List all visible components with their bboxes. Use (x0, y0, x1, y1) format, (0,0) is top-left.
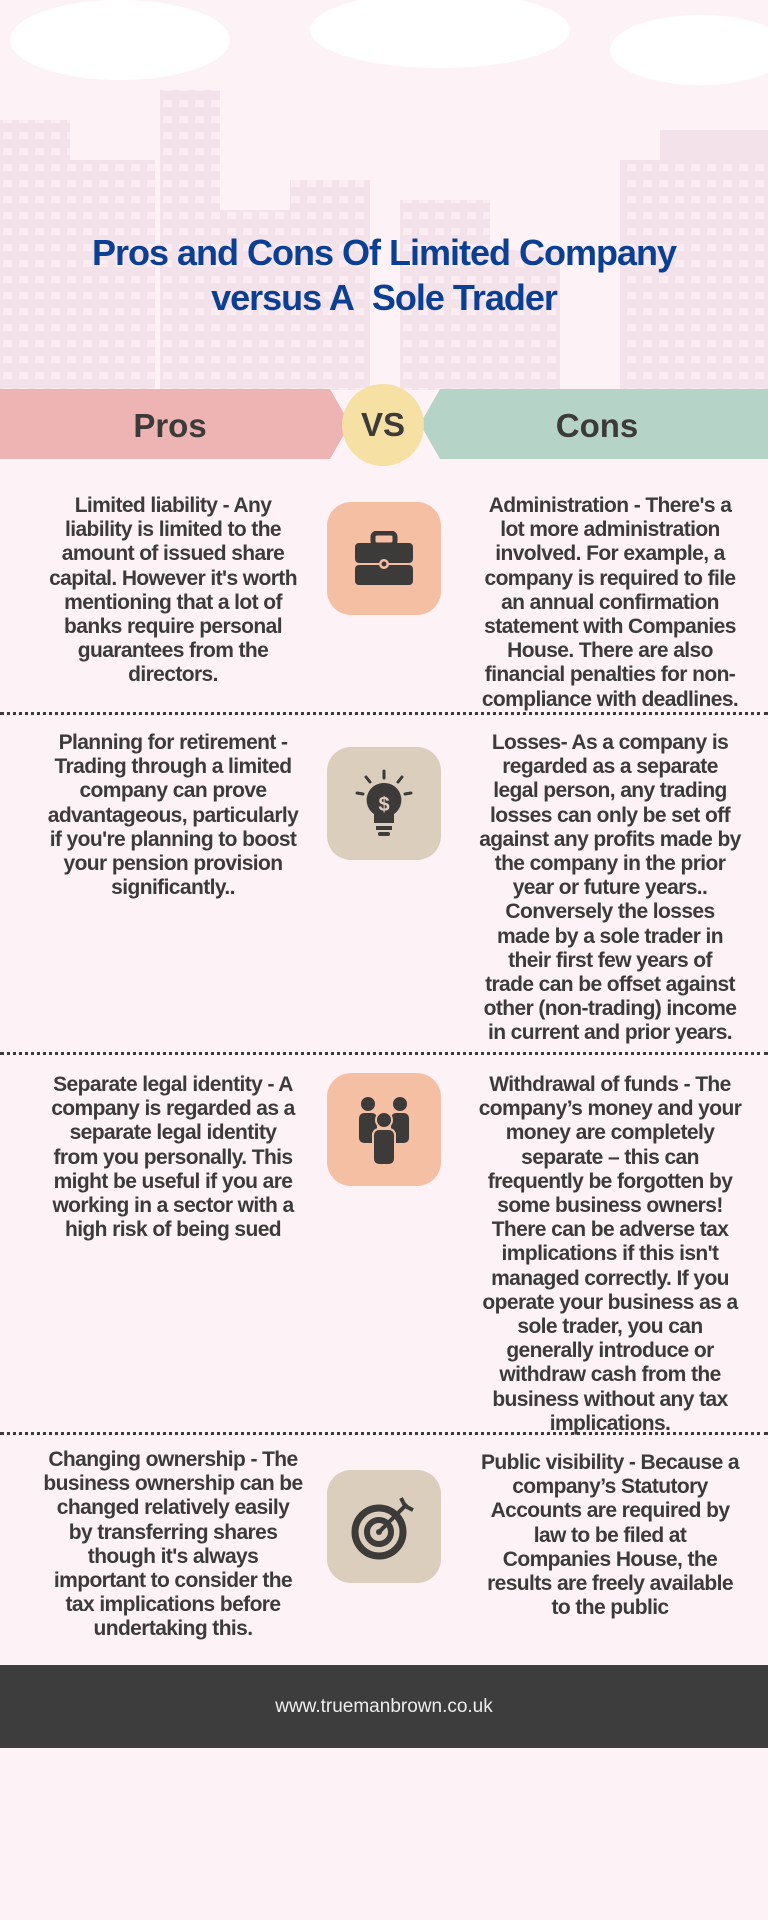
row 3 cons text: money are completely (506, 1121, 714, 1144)
icon: briefcase (327, 502, 441, 615)
footer (0, 1665, 768, 1748)
row 3 cons text: implications. (550, 1412, 670, 1435)
cons band: Cons (556, 407, 638, 444)
row 1 pros text: capital. However it's worth (49, 567, 297, 590)
row 1 cons text: an annual confirmation (501, 591, 719, 614)
row 2 cons text: Losses- As a company is (492, 731, 728, 754)
title: versus A Sole Trader (211, 277, 557, 318)
row 4 cons text: Companies House, the (503, 1548, 717, 1571)
row 4 pros text: Changing ownership - The (48, 1448, 298, 1471)
row 1 pros text: guarantees from the (78, 639, 268, 662)
row 3 cons text: business without any tax (492, 1388, 728, 1411)
row 2 pros text: if you're planning to boost (50, 828, 296, 851)
row 2 cons text: their first few years of (508, 949, 712, 972)
row 4 cons text (481, 1451, 740, 1619)
banner: pros vs cons (0, 389, 768, 459)
row 3 pros text: company is regarded as a (51, 1097, 295, 1120)
row 4 pros text: by transferring shares (69, 1521, 277, 1544)
row 1 pros text: amount of issued share (62, 542, 284, 565)
row 3 cons text: managed correctly. If you (491, 1267, 729, 1290)
icon: target (327, 1470, 441, 1583)
row 1 cons text: involved. For example, a (495, 542, 725, 565)
row 2 cons text: other (non-trading) income (484, 997, 736, 1020)
row 3 cons text: separate – this can (521, 1146, 699, 1169)
row 4 cons text: to the public (551, 1596, 669, 1619)
cons band (420, 389, 768, 459)
row 4 pros text: business ownership can be (43, 1472, 303, 1495)
row 2 pros text: advantageous, particularly (48, 804, 298, 827)
row 2 cons text: made by a sole trader in (497, 925, 723, 948)
title (92, 232, 677, 318)
row 3 pros text: separate legal identity (70, 1121, 276, 1144)
row 4 pros text: changed relatively easily (57, 1496, 289, 1519)
pros band (0, 389, 350, 459)
row 3 cons text: generally introduce or (506, 1339, 714, 1362)
row 3 cons text (479, 1073, 742, 1435)
row 1 pros text: directors. (128, 663, 218, 686)
row 3 cons text: withdraw cash from the (499, 1363, 721, 1386)
row 1 pros text: Limited liability - Any (75, 494, 271, 517)
row 3 cons text: operate your business as a (482, 1291, 738, 1314)
icon: lightbulb dollar: $ (378, 794, 390, 816)
row 2 cons text (479, 731, 742, 1044)
row 1 cons text: financial penalties for non- (485, 663, 735, 686)
background city skyline (0, 0, 768, 390)
row 3 pros text: working in a sector with a (52, 1194, 294, 1217)
row 3 pros text: from you personally. This (54, 1146, 292, 1169)
row 2 pros text: significantly.. (111, 876, 235, 899)
row 1 cons text (482, 494, 738, 711)
row 1 pros text: banks require personal (64, 615, 282, 638)
row 3 cons text: Withdrawal of funds - The (489, 1073, 731, 1096)
row 1 pros text: liability is limited to the (65, 518, 281, 541)
row 4 pros text: tax implications before (66, 1593, 280, 1616)
row 4 cons text: company’s Statutory (512, 1475, 708, 1498)
row 2 cons text: Conversely the losses (505, 900, 715, 923)
row 4 cons text: Accounts are required by (491, 1499, 729, 1522)
row 2 cons text: against any profits made by (479, 828, 741, 851)
row 1 pros text (49, 494, 297, 686)
vs circle (342, 384, 424, 466)
row 4 pros text: though it's always (88, 1545, 258, 1568)
row 2 pros text: Trading through a limited (54, 755, 292, 778)
row 2 pros text: Planning for retirement - (59, 731, 287, 754)
row 1 cons text: company is required to file (484, 567, 736, 590)
row 3 cons text: frequently be forgotten by (488, 1170, 732, 1193)
row 3 pros text: high risk of being sued (65, 1218, 281, 1241)
row 4 pros text (43, 1448, 303, 1640)
row 1 cons text: House. There are also (507, 639, 713, 662)
icon: people group (327, 1073, 441, 1186)
row 2 cons text: legal person, any trading (493, 779, 727, 802)
row 3 cons text: implications if this isn't (502, 1242, 718, 1265)
row 2 pros text: your pension provision (64, 852, 282, 875)
row 1 cons text: compliance with deadlines. (482, 688, 738, 711)
row 4 pros text: undertaking this. (94, 1617, 252, 1640)
row 2 cons text: the company in the prior (495, 852, 725, 875)
row 1 cons text: lot more administration (500, 518, 720, 541)
title: Pros and Cons Of Limited Company (92, 232, 676, 273)
row 4 cons text: law to be filed at (534, 1524, 686, 1547)
row 1 cons text: Administration - There's a (489, 494, 731, 517)
footer: www.truemanbrown.co.uk (275, 1696, 493, 1717)
row 1 cons text: statement with Companies (484, 615, 736, 638)
row 2 cons text: trade can be offset against (485, 973, 735, 996)
row 1 pros text: mentioning that a lot of (64, 591, 282, 614)
row 3 pros text: Separate legal identity - A (53, 1073, 293, 1096)
row 3 cons text: some business owners! (497, 1194, 723, 1217)
row 3 cons text: sole trader, you can (517, 1315, 703, 1338)
row 3 pros text (51, 1073, 296, 1241)
row 4 cons text: results are freely available (487, 1572, 733, 1595)
row 4 cons text: Public visibility - Because a (481, 1451, 739, 1474)
row 2 cons text: losses can only be set off (490, 804, 730, 827)
vs circle: VS (361, 406, 405, 443)
row 4 pros text: important to consider the (54, 1569, 292, 1592)
row 2 cons text: regarded as a separate (502, 755, 718, 778)
row 3 cons text: company’s money and your (479, 1097, 741, 1120)
row 3 cons text: There can be adverse tax (492, 1218, 728, 1241)
icon: lightbulb dollar (327, 747, 441, 860)
row 2 pros text (48, 731, 299, 899)
row 2 pros text: company can prove (79, 779, 267, 802)
pros band: Pros (133, 407, 207, 444)
row 2 cons text: year or future years.. (513, 876, 707, 899)
row 2 cons text: in current and prior years. (488, 1021, 732, 1044)
row 3 pros text: might be useful if you are (54, 1170, 292, 1193)
